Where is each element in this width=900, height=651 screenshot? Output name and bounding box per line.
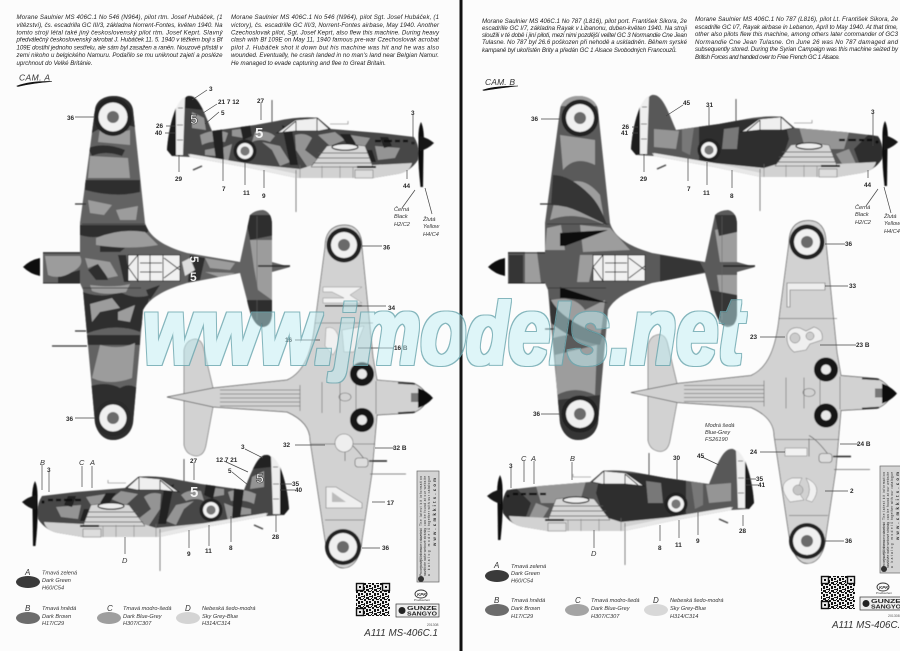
info strip: scheme A: a katalog modelů xyxy=(427,528,431,576)
callouts: scheme B left side profile: 3 xyxy=(509,463,513,470)
text block: scheme A Czech: uprchnout do Velké Británie. xyxy=(16,60,92,67)
callouts: scheme B underside view: 23 xyxy=(750,334,758,341)
text block: scheme A English: victory), čs. escadrille GC III/3, Norrent-Fontes airbase, May 1940. Another xyxy=(231,22,440,29)
info strip: scheme A: navštivte naše webové stránky xyxy=(423,528,427,576)
callouts: scheme B left side profile: 30 xyxy=(673,455,681,462)
callouts: scheme B top view xyxy=(531,116,560,418)
callouts: scheme A left side profile: 27 xyxy=(190,458,198,465)
callouts: scheme B left side profile: B xyxy=(570,454,575,463)
logo: Gunze Sangyo xyxy=(396,604,439,618)
logo: KPK: KPK xyxy=(417,592,427,597)
text block: scheme A Czech xyxy=(16,14,224,67)
callouts: scheme A left side profile: 35 xyxy=(292,481,300,488)
marking: tactical number 5 on left fuselage: 5 xyxy=(190,484,198,501)
swatch: dark blue-grey: Dark Blue-Grey xyxy=(591,606,631,612)
info strip: scheme A: www.cmkkits.com xyxy=(432,478,437,547)
callouts: scheme A underside view: 16 xyxy=(285,337,293,344)
callouts: scheme A side profile: 29 xyxy=(175,176,183,183)
callouts: scheme A underside view: 36 xyxy=(383,244,391,252)
swatch: dark brown: H17/C29 xyxy=(511,614,533,620)
logo: Gunze Sangyo: SANGYO xyxy=(871,604,900,610)
callouts: scheme B side profile: Černá xyxy=(855,204,870,211)
heading: CAM. B xyxy=(483,77,518,90)
swatch: dark green: Tmavá zelená xyxy=(511,564,546,570)
swatch: dark blue-grey xyxy=(565,596,640,620)
callouts: scheme A left side profile: A xyxy=(89,458,95,467)
callouts: scheme A left side profile: D xyxy=(122,556,128,565)
swatch: dark brown: Tmavá hnědá xyxy=(511,598,545,604)
swatch: sky grey-blue xyxy=(644,596,723,620)
swatch: dark blue-grey xyxy=(97,604,172,627)
callouts: scheme A underside view: 32 xyxy=(283,442,291,449)
heading: CAM. A xyxy=(17,72,52,86)
swatch: sky grey-blue: H314/C314 xyxy=(202,621,230,627)
legend: scheme B colours xyxy=(485,561,723,620)
callouts: scheme B side profile: 31 xyxy=(706,102,714,109)
swatch: sky grey-blue: Sky Grey-Blue xyxy=(202,614,238,620)
callouts: scheme A left side profile: 8 xyxy=(229,545,233,552)
swatch: dark green: H60/C54 xyxy=(511,578,533,584)
callouts: scheme B side profile: Yellow xyxy=(884,221,900,227)
callouts: scheme B side profile: H4/C4 xyxy=(884,229,900,235)
aircraft: scheme B top view xyxy=(488,96,755,440)
text block: scheme A Czech: tomto stroji létal také jiný československý pilot rtm. Josef Keprt. Slavný xyxy=(16,30,223,36)
callouts: scheme B underside view: 36 xyxy=(845,538,853,545)
text block: scheme B English: Normandie Cne Jean Tulasne. On June 26 was No 787 damaged and xyxy=(695,39,899,46)
text block: scheme A English: He managed to evade capturing and flee to Great Britain. xyxy=(231,60,386,67)
callouts: scheme A side profile: 3 xyxy=(411,110,415,117)
swatch: dark green: Dark Green xyxy=(511,571,540,577)
heading: CAM. A: CAM. A xyxy=(19,72,50,82)
callouts: scheme A side profile: Yellow xyxy=(423,224,440,230)
callouts: scheme A side profile: 11 xyxy=(243,190,250,197)
callouts: scheme A underside view: 32 B xyxy=(393,445,407,452)
callouts: scheme A side profile: 26 xyxy=(156,123,164,130)
callouts: scheme B left side profile: A xyxy=(530,454,536,463)
info strip: scheme B: The latest kit information xyxy=(882,472,886,520)
swatch: dark green: Dark Green xyxy=(42,578,71,584)
info strip: scheme A: together with our catalogue xyxy=(427,476,431,526)
callouts: scheme B underside view: 23 B xyxy=(856,342,870,349)
logo: KPK xyxy=(876,583,892,595)
swatch: sky grey-blue: D xyxy=(653,596,659,605)
callouts: scheme B top view: 36 xyxy=(531,116,539,123)
callouts: scheme B side profile: 41 xyxy=(621,130,629,137)
callouts: scheme B side profile: 29 xyxy=(640,176,648,183)
callouts: scheme B side profile: Žlutá xyxy=(883,212,896,220)
logo: KPK: Prodloužení xyxy=(876,591,892,595)
callouts: scheme B left side profile: C xyxy=(521,454,527,463)
text block: scheme B English xyxy=(695,16,899,61)
text block: scheme A Czech: zemi nikoho u belgického Namuru. Podařilo se mu uniknout zajetí a posléze xyxy=(16,52,223,59)
text block: scheme B Czech: Tulasne. No 787 byl 26.6 poškozen při nehodě a uskladněn. Během syrské xyxy=(482,39,688,46)
swatch: dark brown: B xyxy=(25,604,31,613)
aircraft: scheme B underside view xyxy=(631,220,897,564)
text block: scheme B English: escadrille GC I/7, Rayak airbase in Lebanon, April to May 1940. At that time, xyxy=(695,24,898,31)
text block: scheme A English: Czechoslovak pilot, Sgt. Josef Keprt, also flew this machine. During heavy xyxy=(231,30,440,36)
catalogue number: scheme A page xyxy=(363,623,439,639)
text block: scheme B Czech: sloužili v té době i jiní piloti, mezi nimi pozdější velitel GC 3 Normandie Cne Jean xyxy=(482,32,688,39)
callouts: scheme A left side profile: 40 xyxy=(295,487,303,494)
text block: scheme A English: Morane Saulnier MS 406C.1 No 546 (N964), pilot Sgt. Josef Hubáček, (1 xyxy=(231,14,439,21)
callouts: scheme B side profile: 3 xyxy=(871,109,875,116)
info strip: scheme B: together with our catalogue xyxy=(890,472,894,520)
callouts: scheme B left side profile xyxy=(509,453,766,558)
swatch: dark blue-grey: C xyxy=(107,604,113,613)
info strip: scheme B: navštivte naše webové stránky xyxy=(886,522,890,568)
callouts: scheme A side profile: 5 xyxy=(221,110,225,117)
swatch: dark blue-grey: H307/C307 xyxy=(123,621,152,627)
catalogue number: scheme A page: A111 MS-406C.1 xyxy=(363,628,438,639)
callouts: scheme A underside view xyxy=(283,244,408,552)
logo: Gunze Sangyo: SANGYO xyxy=(407,612,437,618)
info strip: scheme A: The latest kit information xyxy=(419,476,423,526)
callouts: scheme A left side profile: 9 xyxy=(187,551,191,558)
info strip: scheme A: can be found at our website xyxy=(423,476,427,526)
swatch: dark blue-grey: Tmavá modro-šedá xyxy=(591,598,640,604)
callouts: scheme A side profile: 44 xyxy=(403,183,411,190)
marking: tactical number 5 on fin: 5 xyxy=(190,111,198,127)
callouts: scheme A side profile xyxy=(155,86,440,238)
aircraft: scheme A right side profile xyxy=(167,96,434,212)
swatch: sky grey-blue: Nebeská šedo-modrá xyxy=(670,598,723,604)
callouts: scheme B left side profile: 8 xyxy=(658,545,662,552)
marking: tactical number 5 on fuselage: 5 xyxy=(255,125,263,142)
info strip: scheme A xyxy=(417,471,439,582)
callouts: scheme B side profile: 7 xyxy=(687,186,691,193)
swatch: dark brown: Dark Brown xyxy=(511,606,540,612)
callouts: scheme B underside view: 24 xyxy=(750,449,758,456)
text block: scheme A English xyxy=(230,14,440,67)
callouts: scheme B underside view: 36 xyxy=(845,241,853,248)
swatch: dark green xyxy=(485,561,546,584)
callouts: scheme A side profile: 9 xyxy=(262,193,266,200)
swatch: sky grey-blue: Nebeská šedo-modrá xyxy=(202,606,255,612)
callouts: scheme B underside view: 24 B xyxy=(857,441,871,448)
text block: scheme A Czech: vítězství), čs. escadrilla GC III/3, základna Norrent-Fontes, květen 1940. Na xyxy=(16,22,223,29)
callouts: scheme B side profile: 11 xyxy=(703,190,710,197)
logo: Gunze Sangyo xyxy=(860,597,900,610)
text block: scheme A Czech: předválečný československý akrobat J. Hubáček 11. 5. 1940 v těžkém boji s Bf xyxy=(16,36,224,44)
text block: scheme A English: wounded. Eventually, he crash landed in no man's land near Belgian Namur. xyxy=(231,52,439,59)
text block: scheme B English: Morane Saulnier MS 406C.1 No 787 (L816), pilot Lt. František Sikora, 2e xyxy=(695,16,899,23)
marking: tactical number 5 on left fin: 5 xyxy=(256,470,264,486)
callouts: scheme A top view: 36 xyxy=(66,416,74,423)
aircraft: scheme A underside view xyxy=(167,225,433,568)
logo: KPK xyxy=(414,590,430,602)
info strip: scheme B: Pro nejnovější informace o stavebnici xyxy=(882,522,886,568)
callouts: scheme A left side profile: 12 7 21 xyxy=(216,457,238,464)
swatch: dark brown xyxy=(485,596,545,620)
swatch: dark blue-grey: Dark Blue-Grey xyxy=(123,614,163,620)
callouts: scheme B side profile xyxy=(621,100,900,235)
text block: scheme B Czech: Morane Saulnier MS 406C.1 No 787 (L816), pilot port. František Sikora, 2e xyxy=(482,18,688,25)
callouts: scheme A side profile: 3 xyxy=(209,86,213,93)
callouts: scheme B side profile: H2/C2 xyxy=(855,220,872,226)
callouts: scheme A underside view: 36 xyxy=(382,545,390,552)
callouts: scheme B underside view: Blue-Grey xyxy=(705,430,731,436)
aircraft: scheme B right side profile xyxy=(631,95,898,211)
callouts: scheme B left side profile: 45 xyxy=(697,453,705,460)
callouts: scheme A side profile: H2/C2 xyxy=(394,222,411,228)
marking: tactical numbers on top view: 5 xyxy=(187,256,201,263)
text block: scheme B English: British Forces and handed over to Free French GC 1 Alsace. xyxy=(695,54,840,61)
info strip: scheme B: a katalog modelů xyxy=(890,522,894,568)
callouts: scheme B top view: 36 xyxy=(533,411,541,418)
callouts: scheme A side profile: H4/C4 xyxy=(423,232,439,238)
swatch: dark blue-grey: Tmavá modro-šedá xyxy=(123,606,172,612)
callouts: scheme A left side profile: 28 xyxy=(272,534,280,541)
callouts: scheme A left side profile xyxy=(40,444,303,565)
swatch: dark blue-grey: C xyxy=(575,596,581,605)
swatch: dark green: Tmavá zelená xyxy=(42,570,77,576)
callouts: scheme B left side profile: 41 xyxy=(758,482,766,489)
callouts: scheme B underside view xyxy=(705,241,871,545)
swatch: sky grey-blue: D xyxy=(185,604,191,613)
callouts: scheme A left side profile: 11 xyxy=(205,548,212,555)
callouts: scheme B left side profile: 28 xyxy=(739,528,747,535)
QR code: scheme B xyxy=(821,576,855,609)
catalogue number: scheme B page xyxy=(831,614,900,631)
text block: scheme B English: other also pilots flew this machine, among others later commander of GC3 xyxy=(695,31,899,38)
callouts: scheme A top view xyxy=(66,115,95,423)
callouts: scheme A left side profile: C xyxy=(79,458,85,467)
marking: tactical numbers on top view xyxy=(187,256,201,284)
info strip: scheme B: www.cmkkits.com xyxy=(895,472,900,541)
swatch: dark brown: H17/C29 xyxy=(42,621,64,627)
marking: tactical numbers on top view: 5 xyxy=(190,270,197,284)
page divider xyxy=(460,0,462,651)
swatch: sky grey-blue: Sky Grey-Blue xyxy=(670,606,706,612)
callouts: scheme A side profile: 7 xyxy=(222,186,226,193)
text block: scheme B Czech: escadrille GC I/7, základna Rayak v Libanonu, duben-květen 1940. Na stroji xyxy=(482,25,688,32)
callouts: scheme A left side profile: 3 xyxy=(47,467,51,474)
callouts: scheme A underside view: 16 B xyxy=(394,345,408,352)
catalogue number: scheme A page: 201308 xyxy=(427,623,439,627)
callouts: scheme A left side profile: B xyxy=(40,458,45,467)
logo: KPK: KPK xyxy=(879,585,889,590)
swatch: dark brown: Tmavá hnědá xyxy=(42,606,76,612)
text block: scheme A English: clash with Bf 109E on May 11, 1940 famous pre-war Czechoslovak acrobat xyxy=(231,36,439,44)
legend: scheme A colours xyxy=(16,568,255,627)
callouts: scheme A side profile: Žlutá xyxy=(422,215,435,223)
callouts: scheme B underside view: 2 xyxy=(850,488,854,495)
info strip: scheme B: can be found at our website xyxy=(886,472,890,520)
callouts: scheme B side profile: Black xyxy=(855,212,870,218)
callouts: scheme A top view: 36 xyxy=(67,115,75,122)
callouts: scheme A left side profile: 5 xyxy=(228,468,232,475)
info strip: scheme A: Pro nejnovější informace o stavebnici xyxy=(419,528,423,576)
callouts: scheme A underside view: 34 xyxy=(388,305,396,312)
callouts: scheme B left side profile: 11 xyxy=(675,542,682,549)
swatch: dark green xyxy=(16,568,77,592)
text block: scheme A Czech: Morane Saulnier MS 406C.1 No 546 (N964), pilot rtm. Josef Hubáček, (1 xyxy=(16,14,222,21)
callouts: scheme A side profile: Černá xyxy=(394,206,409,213)
swatch: sky grey-blue xyxy=(176,604,255,627)
callouts: scheme B left side profile: 9 xyxy=(696,538,700,545)
aircraft: scheme A top view xyxy=(23,96,290,440)
swatch: dark blue-grey: H307/C307 xyxy=(591,614,620,620)
callouts: scheme B underside view: Modrá šedá xyxy=(705,423,735,429)
logo: Gunze Sangyo: GUNZE xyxy=(407,606,438,612)
logo: Gunze Sangyo: GUNZE xyxy=(871,599,900,605)
text block: scheme A Czech: 109E dostihl jednoho sestřelu, ale sám byl zasažen a raněn. Nouzově přistál v xyxy=(16,44,223,52)
callouts: scheme A side profile: 27 xyxy=(257,98,265,105)
logo: KPK: Prodloužení xyxy=(414,598,430,602)
callouts: scheme B side profile: 26 xyxy=(622,124,630,131)
heading: CAM. B: CAM. B xyxy=(485,77,515,87)
callouts: scheme A side profile: 40 xyxy=(155,130,163,137)
info strip: scheme B xyxy=(880,466,900,573)
text block: scheme B Czech: kampaně byl ukořistěn Brity a předán GC 1 Alsace Svobodných Francouzů. xyxy=(482,47,677,54)
QR code: scheme A xyxy=(356,583,390,616)
swatch: dark green: H60/C54 xyxy=(42,586,64,592)
swatch: dark brown xyxy=(16,604,76,627)
callouts: scheme B left side profile: 35 xyxy=(756,476,764,483)
callouts: scheme A side profile: 21 7 12 xyxy=(218,99,240,106)
callouts: scheme A side profile: Black xyxy=(394,214,409,220)
catalogue number: scheme B page: 201308 xyxy=(888,614,900,618)
callouts: scheme B side profile: 45 xyxy=(683,100,691,107)
text block: scheme B English: subsequently stored. During the Syrian Campaign was this machine seized by xyxy=(695,46,899,53)
swatch: dark green: A xyxy=(493,561,499,570)
callouts: scheme B left side profile: D xyxy=(591,549,597,558)
text block: scheme B Czech xyxy=(482,18,688,54)
callouts: scheme B underside view: FS26190 xyxy=(705,437,729,443)
callouts: scheme A left side profile: 3 xyxy=(241,444,245,451)
swatch: dark brown: Dark Brown xyxy=(42,614,71,620)
callouts: scheme A underside view: 17 xyxy=(387,500,395,507)
callouts: scheme B side profile: 44 xyxy=(864,182,872,189)
swatch: dark brown: B xyxy=(494,596,500,605)
swatch: sky grey-blue: H314/C314 xyxy=(670,614,698,620)
aircraft: scheme B left side profile xyxy=(487,449,754,565)
watermark: www.jmodels.net xyxy=(143,278,746,385)
aircraft: scheme A left side profile xyxy=(22,455,289,571)
callouts: scheme B underside view: 33 xyxy=(849,283,857,290)
callouts: scheme B side profile: 8 xyxy=(730,193,734,200)
swatch: dark green: A xyxy=(24,568,30,577)
text block: scheme A English: pilot J. Hubáček shot it down but his machine was hit and he was also xyxy=(230,44,440,52)
